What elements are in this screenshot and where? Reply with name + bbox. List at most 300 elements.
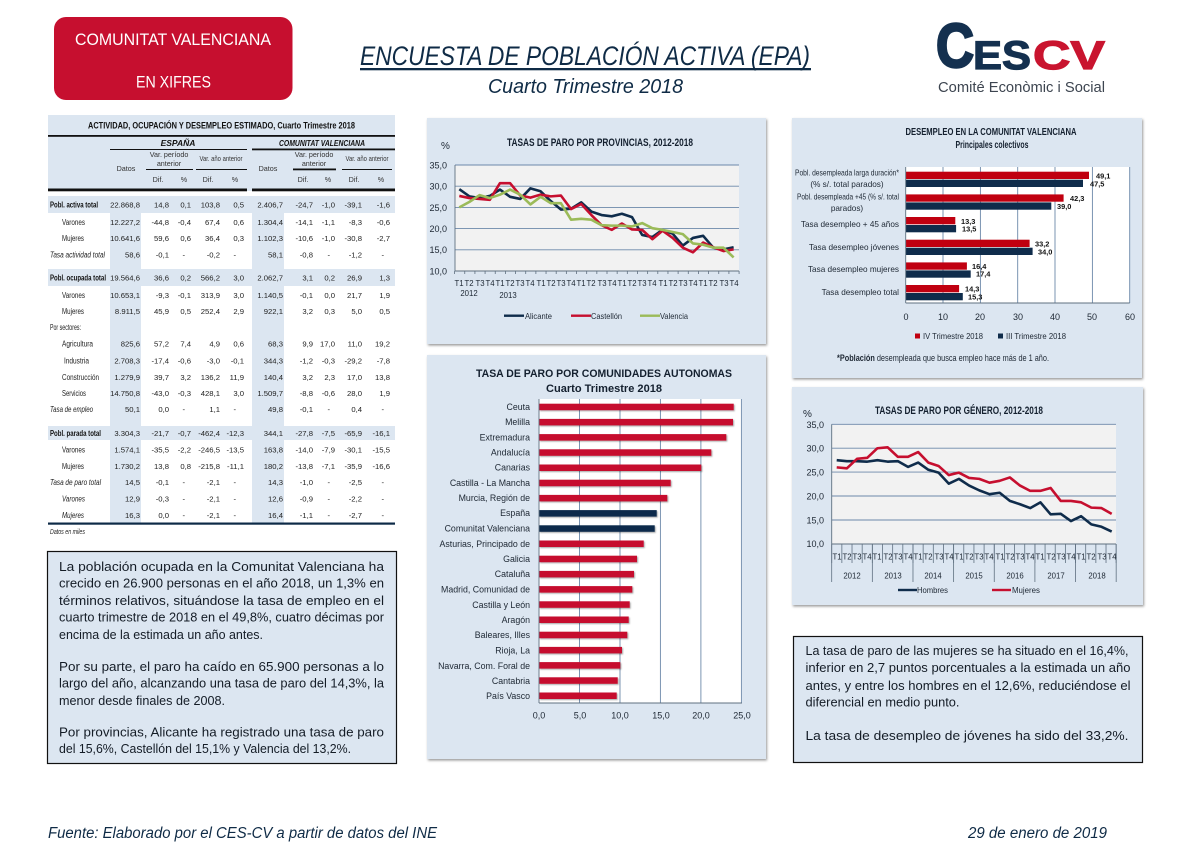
panel: tasa de paro por comunidades autonomas: Galicia [503, 554, 530, 564]
table: actividad, ocupacion y desempleo: Por sectores: [50, 323, 81, 332]
panel: tasas de paro por genero: T3 [893, 552, 903, 562]
table: actividad, ocupacion y desempleo: -2,7 [349, 511, 362, 520]
panel: desempleo en la Comunitat Valenciana: 47,5 [1090, 180, 1104, 188]
panel: tasa de paro por comunidades autonomas: Canarias [495, 462, 531, 472]
table: actividad, ocupacion y desempleo: -39,1 [344, 200, 362, 210]
panel: desempleo en la Comunitat Valenciana: IV Trimestre 2018 [923, 331, 983, 341]
panel: desempleo en la Comunitat Valenciana: 40 [1050, 312, 1060, 322]
table: actividad, ocupacion y desempleo: Datos en miles [50, 529, 85, 536]
table: actividad, ocupacion y desempleo: 344,1 [264, 429, 283, 438]
panel: tasa de paro por comunidades autonomas: Murcia, Región de [459, 493, 530, 503]
footer: fuente: Fuente: Elaborado por el CES-CV a partir de datos del INE [48, 825, 438, 842]
panel: desempleo en la Comunitat Valenciana: parados) [831, 204, 863, 213]
table: actividad, ocupacion y desempleo: % [232, 175, 239, 184]
table: actividad, ocupacion y desempleo: -0,6 [178, 356, 191, 366]
table: actividad, ocupacion y desempleo: - [327, 511, 330, 520]
panel: tasas de paro por provincias: T3 [556, 279, 566, 288]
table: actividad, ocupacion y desempleo: -0,3 [322, 356, 335, 366]
table: actividad, ocupacion y desempleo: 2.708,3 [114, 356, 140, 366]
logo: CES CV [936, 12, 1105, 96]
panel: tasas de paro por genero: T2 [1005, 552, 1015, 562]
table: actividad, ocupacion y desempleo: -8,8 [300, 389, 313, 398]
table: actividad, ocupacion y desempleo: 2.406,7 [257, 200, 283, 210]
line: Alicante [459, 188, 734, 249]
panel: desempleo en la Comunitat Valenciana: 60 [1125, 312, 1135, 322]
panel: tasa de paro por comunidades autonomas: Castilla - La Mancha [450, 478, 530, 488]
table: actividad, ocupacion y desempleo: Varones [62, 291, 85, 300]
table: actividad, ocupacion y desempleo: -7,5 [322, 429, 335, 438]
panel: tasas de paro por genero: T1 [832, 552, 842, 562]
table: actividad, ocupacion y desempleo: Datos [117, 164, 136, 173]
table: actividad, ocupacion y desempleo: 0,6 [233, 218, 244, 227]
table: actividad, ocupacion y desempleo: -1,6 [377, 200, 390, 210]
table: actividad, ocupacion y desempleo: 5,0 [351, 307, 362, 316]
table: actividad, ocupacion y desempleo: 11,9 [230, 373, 244, 382]
panel: tasas de paro por genero: T1 [1035, 552, 1045, 562]
table: actividad, ocupacion y desempleo: 36,4 [205, 234, 221, 243]
table: actividad, ocupacion y desempleo: -246,5 [198, 446, 220, 454]
panel: tasas de paro por provincias: T2 [505, 279, 515, 288]
panel: tasa de paro por comunidades autonomas: España [500, 508, 530, 518]
table: actividad, ocupacion y desempleo: -13,8 [295, 462, 313, 471]
text block: mujeres, hombres y jovenes: La tasa de desempleo de jóvenes ha sido del 33,2%. [806, 728, 1128, 743]
panel: desempleo en la Comunitat Valenciana [792, 118, 1142, 378]
table: actividad, ocupacion y desempleo: Dif. [153, 175, 163, 184]
table: actividad, ocupacion y desempleo: 28,0 [347, 389, 362, 398]
panel: tasas de paro por provincias: % [441, 141, 450, 152]
panel: desempleo en la Comunitat Valenciana: Tasa desempleo jóvenes [809, 243, 899, 252]
panel: tasas de paro por genero: T3 [852, 552, 862, 562]
panel: tasas de paro por provincias: T4 [525, 279, 535, 288]
table: actividad, ocupacion y desempleo: Var. año anterior [200, 154, 243, 163]
panel: tasas de paro por provincias: T1 [536, 279, 546, 288]
table: actividad, ocupacion y desempleo: 3,0 [233, 291, 244, 300]
table: actividad, ocupacion y desempleo: -16,1 [372, 429, 390, 438]
text block: mujeres, hombres y jovenes: inferior en 2,7 puntos porcentuales a la estimada un año [806, 660, 1130, 675]
table: actividad, ocupacion y desempleo: -30,1 [344, 446, 362, 454]
title [360, 41, 811, 98]
table: actividad, ocupacion y desempleo: 922,1 [264, 307, 283, 316]
panel: tasas de paro por genero: 2018 [1088, 572, 1106, 580]
table: actividad, ocupacion y desempleo: Var. año anterior [346, 154, 389, 163]
table: actividad, ocupacion y desempleo: 10.641,6 [110, 234, 140, 243]
table: actividad, ocupacion y desempleo: 12,9 [125, 494, 140, 504]
panel: tasas de paro por genero: T1 [1076, 552, 1086, 562]
line: Valencia [459, 190, 734, 257]
table: actividad, ocupacion y desempleo: 3,0 [233, 389, 244, 398]
table: actividad, ocupacion y desempleo: -0,4 [178, 218, 192, 227]
table: actividad, ocupacion y desempleo: 103,8 [201, 200, 220, 210]
table: actividad, ocupacion y desempleo: 0,1 [180, 200, 191, 210]
panel: tasa de paro por comunidades autonomas: Extremadura [480, 432, 530, 442]
table: actividad, ocupacion y desempleo: -17,4 [151, 356, 170, 366]
table: actividad, ocupacion y desempleo: - [381, 511, 384, 520]
table: actividad, ocupacion y desempleo: Tasa de paro total [50, 478, 101, 487]
panel: tasas de paro por genero: T1 [872, 552, 882, 562]
text block: empleo y paro: Por provincias, Alicante ha registrado una tasa de paro [59, 725, 384, 740]
panel: tasa de paro por comunidades autonomas: Cantabria [492, 676, 530, 686]
table: actividad, ocupacion y desempleo: - [381, 494, 384, 504]
table: actividad, ocupacion y desempleo: -16,6 [372, 462, 390, 471]
table: actividad, ocupacion y desempleo: 0,8 [180, 462, 191, 471]
table: actividad, ocupacion y desempleo: 1.574,1 [114, 446, 140, 454]
table: actividad, ocupacion y desempleo: -0,7 [178, 429, 191, 438]
table: actividad, ocupacion y desempleo: -24,7 [295, 200, 313, 210]
table: actividad, ocupacion y desempleo: Mujeres [62, 462, 84, 471]
panel: tasas de paro por provincias: T2 [708, 279, 718, 288]
table: actividad, ocupacion y desempleo: 45,9 [154, 307, 169, 316]
panel: tasas de paro por genero: T4 [862, 552, 872, 562]
panel: desempleo en la Comunitat Valenciana: 30 [1013, 312, 1023, 322]
panel: desempleo en la Comunitat Valenciana: 34,0 [1038, 248, 1052, 256]
table: actividad, ocupacion y desempleo: - [327, 494, 330, 504]
panel: tasas de paro por provincias: 2012 [460, 289, 478, 298]
table: actividad, ocupacion y desempleo: % [325, 175, 332, 184]
panel: tasas de paro por provincias: T2 [586, 279, 596, 288]
table: actividad, ocupacion y desempleo: -8,3 [349, 218, 362, 227]
table: actividad, ocupacion y desempleo: 0,3 [233, 234, 244, 243]
panel: tasas de paro por provincias: T3 [719, 279, 729, 288]
table: actividad, ocupacion y desempleo: anterior [157, 159, 182, 168]
table: actividad, ocupacion y desempleo: 2,3 [324, 373, 335, 382]
table: actividad, ocupacion y desempleo: -0,1 [300, 405, 313, 414]
table: actividad, ocupacion y desempleo: -44,8 [151, 218, 169, 227]
panel: tasas de paro por provincias: T2 [627, 279, 637, 288]
panel: desempleo en la Comunitat Valenciana: 49,1 [1096, 172, 1110, 180]
table: actividad, ocupacion y desempleo: Var. período [150, 150, 188, 159]
table: actividad, ocupacion y desempleo: -7,1 [322, 462, 335, 471]
table: actividad, ocupacion y desempleo: Varones [62, 446, 85, 454]
badge: Comunitat Valenciana en xifres: EN XIFRES [136, 73, 211, 91]
panel: desempleo en la Comunitat Valenciana: Tasa desempleo + 45 años [801, 220, 899, 229]
panel: desempleo en la Comunitat Valenciana: 33,2 [1035, 240, 1049, 248]
panel: desempleo en la Comunitat Valenciana: (% s/. total parados) [810, 180, 884, 189]
table: actividad, ocupacion y desempleo: 10.653,1 [110, 291, 140, 300]
table: actividad, ocupacion y desempleo: -30,8 [344, 234, 362, 243]
table: actividad, ocupacion y desempleo: 58,1 [268, 250, 283, 260]
table: actividad, ocupacion y desempleo: 0,5 [379, 307, 390, 316]
panel: tasas de paro por genero: T3 [1015, 552, 1025, 562]
table: actividad, ocupacion y desempleo: 0,0 [158, 405, 169, 414]
table: actividad, ocupacion y desempleo: -2,2 [178, 446, 191, 454]
panel: tasas de paro por provincias: T2 [464, 279, 474, 288]
table: actividad, ocupacion y desempleo: -29,2 [344, 356, 362, 366]
panel: tasas de paro por genero: 10,0 [806, 539, 824, 549]
table: actividad, ocupacion y desempleo: 11,0 [348, 340, 362, 348]
panel: tasas de paro por provincias: T1 [454, 279, 464, 288]
text block: empleo y paro: menor desde finales de 2008. [59, 693, 225, 708]
panel: tasas de paro por provincias: T3 [678, 279, 688, 288]
panel: tasas de paro por genero: 2016 [1006, 572, 1024, 580]
table: actividad, ocupacion y desempleo: -462,4 [198, 429, 221, 438]
table: actividad, ocupacion y desempleo: 1.140,5 [257, 291, 283, 300]
table: actividad, ocupacion y desempleo: Pobl. parada total [50, 429, 101, 438]
table: actividad, ocupacion y desempleo: 136,2 [201, 373, 220, 382]
table: actividad, ocupacion y desempleo: Tasa actividad total [50, 250, 105, 260]
panel: tasa de paro por comunidades autonomas: 15,0 [652, 710, 670, 720]
text block: empleo y paro: encima de la estimada un año antes. [59, 627, 263, 642]
table: actividad, ocupacion y desempleo: -1,1 [300, 511, 313, 520]
table: actividad, ocupacion y desempleo: 0,0 [324, 291, 335, 300]
panel: tasas de paro por genero: T4 [1025, 552, 1035, 562]
table: actividad, ocupacion y desempleo: 3,0 [233, 274, 244, 282]
panel: tasas de paro por provincias: T3 [637, 279, 647, 288]
table: actividad, ocupacion y desempleo: 14.750,8 [110, 389, 140, 398]
table: actividad, ocupacion y desempleo: 3,2 [180, 373, 191, 382]
table: actividad, ocupacion y desempleo: -1,0 [322, 234, 335, 243]
table: actividad, ocupacion y desempleo: Mujeres [62, 307, 84, 316]
table: actividad, ocupacion y desempleo: 4,9 [209, 340, 220, 348]
panel: tasas de paro por provincias: 2013 [499, 291, 517, 300]
table: actividad, ocupacion y desempleo: 58,6 [125, 250, 140, 260]
panel: tasas de paro por provincias: 10,0 [429, 266, 447, 276]
table: actividad, ocupacion y desempleo: -11,1 [227, 462, 244, 471]
logo: CES CV: CV [1033, 34, 1105, 78]
table: actividad, ocupacion y desempleo: Servicios [62, 389, 86, 398]
panel: desempleo en la Comunitat Valenciana: 42,3 [1070, 194, 1084, 203]
table: actividad, ocupacion y desempleo: % [181, 175, 188, 184]
table: actividad, ocupacion y desempleo: 140,4 [264, 373, 284, 382]
table: actividad, ocupacion y desempleo: -1,0 [322, 200, 335, 210]
table: actividad, ocupacion y desempleo: - [381, 250, 384, 260]
panel: tasas de paro por genero: T4 [903, 552, 913, 562]
panel: desempleo en la Comunitat Valenciana: Tasa desempleo total [822, 288, 899, 297]
table: actividad, ocupacion y desempleo: - [327, 250, 330, 260]
table: actividad, ocupacion y desempleo: - [182, 478, 185, 487]
table: actividad, ocupacion y desempleo: 3.304,3 [114, 429, 140, 438]
table: actividad, ocupacion y desempleo: Mujeres [62, 511, 84, 520]
line: Mujeres [837, 447, 1112, 514]
panel: tasas de paro por provincias: 15,0 [429, 245, 447, 255]
logo: CES CV: C [936, 12, 974, 81]
panel: tasas de paro por genero: 15,0 [806, 516, 824, 526]
panel: tasas de paro por genero [792, 387, 1143, 605]
table: actividad, ocupacion y desempleo: -43,0 [151, 389, 169, 398]
table: actividad, ocupacion y desempleo: -0,6 [322, 389, 335, 398]
table: actividad, ocupacion y desempleo: -215,8 [198, 462, 220, 471]
panel: tasas de paro por provincias: T4 [647, 279, 657, 288]
table: actividad, ocupacion y desempleo: -9,3 [156, 291, 169, 300]
table: actividad, ocupacion y desempleo: 8.911,5 [115, 307, 140, 316]
table: actividad, ocupacion y desempleo: 7,4 [180, 340, 192, 348]
text block: empleo y paro: crecido en 26.900 personas en el año 2018, un 1,3% en [59, 576, 384, 591]
panel: tasas de paro por genero: T2 [964, 552, 974, 562]
panel: tasas de paro por genero: 2014 [924, 572, 942, 580]
table: actividad, ocupacion y desempleo: 0,0 [158, 511, 169, 520]
table: actividad, ocupacion y desempleo: Dif. [203, 175, 213, 184]
table: actividad, ocupacion y desempleo: -0,1 [231, 356, 244, 366]
panel: tasa de paro por comunidades autonomas: Ceuta [507, 402, 530, 412]
table: actividad, ocupacion y desempleo: 1.730,2 [114, 462, 140, 471]
text block: empleo y paro: del 15,6%, Castellón del 15,1% y Valencia del 13,2%. [59, 741, 351, 756]
table: actividad, ocupacion y desempleo: 566,2 [201, 274, 220, 282]
panel: tasas de paro por genero: T1 [954, 552, 964, 562]
table: actividad, ocupacion y desempleo: - [182, 250, 185, 260]
table: actividad, ocupacion y desempleo: 2,9 [233, 307, 244, 316]
table: actividad, ocupacion y desempleo: -1,2 [300, 356, 313, 366]
table: actividad, ocupacion y desempleo: -2,2 [349, 494, 362, 504]
table: actividad, ocupacion y desempleo: 180,2 [264, 462, 283, 471]
panel: tasa de paro por comunidades autonomas: Navarra, Com. Foral de [438, 661, 530, 671]
table: actividad, ocupacion y desempleo: Dif. [349, 175, 359, 184]
table: actividad, ocupacion y desempleo: 0,5 [180, 307, 191, 316]
table: actividad, ocupacion y desempleo: COMUNITAT VALENCIANA [279, 138, 365, 148]
panel: tasas de paro por provincias: 30,0 [429, 182, 447, 192]
table: actividad, ocupacion y desempleo: -15,5 [372, 446, 390, 454]
table: actividad, ocupacion y desempleo: ESPAÑA [161, 138, 195, 148]
panel: tasas de paro por provincias: 20,0 [429, 224, 447, 234]
table: actividad, ocupacion y desempleo: 1,1 [209, 405, 220, 414]
panel: tasas de paro por provincias: T1 [617, 279, 627, 288]
panel: tasas de paro por provincias [427, 118, 766, 344]
table: actividad, ocupacion y desempleo: -35,9 [344, 462, 362, 471]
table: actividad, ocupacion y desempleo: Agricultura [62, 340, 93, 348]
table: actividad, ocupacion y desempleo: 36,6 [154, 274, 169, 282]
table: actividad, ocupacion y desempleo: 1.102,3 [257, 234, 283, 243]
table: actividad, ocupacion y desempleo: 1.279,9 [114, 373, 140, 382]
panel: tasas de paro por genero: T2 [1046, 552, 1056, 562]
table: actividad, ocupacion y desempleo: -2,1 [207, 511, 220, 520]
panel: tasas de paro por provincias: T4 [566, 279, 576, 288]
text block: empleo y paro: Por su parte, el paro ha caído en 65.900 personas a lo [59, 659, 384, 674]
table: actividad, ocupacion y desempleo: Varones [62, 218, 85, 227]
table: actividad, ocupacion y desempleo: - [233, 250, 236, 260]
table: actividad, ocupacion y desempleo: - [233, 405, 236, 414]
table: actividad, ocupacion y desempleo: 17,0 [320, 340, 335, 348]
panel: tasas de paro por genero: 2017 [1047, 572, 1065, 580]
table: actividad, ocupacion y desempleo: 2.062,7 [257, 274, 283, 282]
panel: tasa de paro por comunidades autonomas: 0,0 [533, 710, 545, 720]
table: actividad, ocupacion y desempleo: 21,7 [347, 291, 362, 300]
panel: tasa de paro por comunidades autonomas: Asturias, Principado de [440, 539, 530, 549]
table: actividad, ocupacion y desempleo: -1,0 [300, 478, 313, 487]
panel: tasas de paro por provincias: Valencia [660, 311, 688, 321]
table: actividad, ocupacion y desempleo: 14,3 [268, 478, 283, 487]
title: Cuarto Trimestre 2018 [488, 76, 683, 98]
table: actividad, ocupacion y desempleo: Construcción [62, 373, 99, 382]
table: actividad, ocupacion y desempleo: - [233, 511, 236, 520]
table: actividad, ocupacion y desempleo: 13,8 [375, 373, 390, 382]
panel: tasas de paro por provincias: Castellón [591, 311, 622, 321]
table: actividad, ocupacion y desempleo: % [378, 175, 385, 184]
panel: tasas de paro por provincias: T4 [607, 279, 617, 288]
table: actividad, ocupacion y desempleo: 57,2 [154, 340, 169, 348]
table: actividad, ocupacion y desempleo: 39,7 [154, 373, 169, 382]
text block: empleo y paro: La población ocupada en la Comunitat Valenciana ha [59, 559, 385, 574]
panel: tasa de paro por comunidades autonomas: País Vasco [486, 691, 530, 701]
panel: tasas de paro por genero: T4 [1107, 552, 1117, 562]
table: actividad, ocupacion y desempleo: 0,6 [180, 234, 191, 243]
table: actividad, ocupacion y desempleo: Tasa de empleo [50, 405, 93, 414]
table: actividad, ocupacion y desempleo: 50,1 [125, 405, 140, 414]
table: actividad, ocupacion y desempleo: -7,8 [377, 356, 390, 366]
table: actividad, ocupacion y desempleo: Pobl. ocupada total [50, 274, 106, 282]
table: actividad, ocupacion y desempleo: 3,2 [302, 307, 313, 316]
table: actividad, ocupacion y desempleo: 1.304,4 [257, 218, 284, 227]
table: actividad, ocupacion y desempleo: -0,1 [156, 250, 169, 260]
table: actividad, ocupacion y desempleo: 9,9 [302, 340, 313, 348]
panel: tasa de paro por comunidades autonomas: Comunitat Valenciana [445, 524, 530, 534]
panel: desempleo en la Comunitat Valenciana: *Población desempleada que busca empleo hace más de 1 año. [837, 353, 1049, 363]
table: actividad, ocupacion y desempleo: 3,2 [302, 373, 313, 382]
table: actividad, ocupacion y desempleo: -12,3 [226, 429, 244, 438]
panel: tasas de paro por provincias: T3 [475, 279, 485, 288]
table: actividad, ocupacion y desempleo: -14,0 [295, 446, 313, 454]
panel: tasas de paro por genero: 2013 [884, 572, 902, 580]
panel: tasa de paro por comunidades autonomas: Madrid, Comunidad de [441, 584, 530, 594]
panel: tasas de paro por provincias: TASAS DE PARO POR PROVINCIAS, 2012-2018 [507, 137, 693, 149]
panel: tasas de paro por genero: T3 [1097, 552, 1107, 562]
panel: desempleo en la Comunitat Valenciana: Principales colectivos [956, 139, 1029, 151]
table: actividad, ocupacion y desempleo: 14,8 [154, 200, 169, 210]
panel: tasas de paro por provincias: T3 [515, 279, 525, 288]
panel: tasa de paro por comunidades autonomas: Cuarto Trimestre 2018 [546, 383, 662, 395]
panel: tasas de paro por genero: 2012 [843, 572, 861, 580]
table: actividad, ocupacion y desempleo: 67,4 [205, 218, 221, 227]
panel: tasas de paro por genero: 20,0 [806, 492, 824, 502]
panel: desempleo en la Comunitat Valenciana: 0 [903, 312, 909, 322]
table: actividad, ocupacion y desempleo: 0,3 [324, 307, 335, 316]
table: actividad, ocupacion y desempleo: -2,1 [207, 494, 220, 504]
badge: Comunitat Valenciana en xifres: COMUNITAT VALENCIANA [75, 31, 271, 49]
table: actividad, ocupacion y desempleo: 1,9 [379, 291, 390, 300]
panel: desempleo en la Comunitat Valenciana: DESEMPLEO EN LA COMUNITAT VALENCIANA [906, 126, 1077, 138]
text block: mujeres, hombres y jovenes: antes, y entre los hombres en el 12,6%, reduciéndose el [806, 678, 1131, 693]
table: actividad, ocupacion y desempleo: anterior [302, 159, 327, 168]
title: ENCUESTA DE POBLACIÓN ACTIVA (EPA) [360, 41, 810, 71]
table: actividad, ocupacion y desempleo: 17,0 [347, 373, 362, 382]
table: actividad, ocupacion y desempleo: 68,3 [268, 340, 283, 348]
table: actividad, ocupacion y desempleo: 0,2 [324, 274, 335, 282]
table: actividad, ocupacion y desempleo: -0,8 [300, 250, 313, 260]
panel: tasas de paro por genero: 30,0 [806, 444, 824, 454]
table: actividad, ocupacion y desempleo: -0,3 [156, 494, 169, 504]
table: actividad, ocupacion y desempleo: 12.227,2 [110, 218, 140, 227]
table: actividad, ocupacion y desempleo [48, 115, 395, 536]
table: actividad, ocupacion y desempleo: - [327, 405, 330, 414]
panel: desempleo en la Comunitat Valenciana: 14,3 [965, 284, 979, 294]
panel: desempleo en la Comunitat Valenciana: 50 [1087, 312, 1097, 322]
panel: tasa de paro por comunidades autonomas: Castilla y León [472, 600, 530, 610]
table: actividad, ocupacion y desempleo: 252,4 [201, 307, 221, 316]
table: actividad, ocupacion y desempleo: 825,6 [121, 340, 140, 348]
table: actividad, ocupacion y desempleo: ACTIVIDAD, OCUPACIÓN Y DESEMPLEO ESTIMADO, Cuarto Trimestre 2018 [88, 120, 355, 132]
panel: tasa de paro por comunidades autonomas: TASA DE PARO POR COMUNIDADES AUTONOMAS [476, 368, 732, 380]
table: actividad, ocupacion y desempleo: -0,6 [377, 218, 390, 227]
panel: tasa de paro por comunidades autonomas: 20,0 [692, 710, 710, 720]
panel: tasas de paro por genero: % [803, 409, 812, 420]
table: actividad, ocupacion y desempleo: -1,2 [349, 250, 362, 260]
panel: desempleo en la Comunitat Valenciana: 20 [975, 312, 985, 322]
table: actividad, ocupacion y desempleo: -14,1 [295, 218, 313, 227]
text block: empleo y paro: largo del año, alcanzando una tasa de paro del 14,3%, la [59, 676, 385, 691]
panel: tasas de paro por genero: TASAS DE PARO POR GÉNERO, 2012-2018 [875, 404, 1043, 417]
table: actividad, ocupacion y desempleo: Pobl. activa total [50, 200, 98, 210]
table: actividad, ocupacion y desempleo: - [381, 405, 384, 414]
table: actividad, ocupacion y desempleo: 1,3 [379, 274, 390, 282]
line: Castellon [459, 183, 734, 252]
table: actividad, ocupacion y desempleo: 344,3 [264, 356, 283, 366]
table: actividad, ocupacion y desempleo: -13,5 [226, 446, 244, 454]
table: actividad, ocupacion y desempleo: -65,9 [344, 429, 362, 438]
table: actividad, ocupacion y desempleo: Datos [259, 164, 278, 173]
table: actividad, ocupacion y desempleo: -0,1 [178, 291, 191, 300]
panel: tasas de paro por provincias: T4 [485, 279, 495, 288]
text block: mujeres, hombres y jovenes [794, 636, 1142, 762]
line: Hombres [837, 460, 1112, 532]
table: actividad, ocupacion y desempleo: 0,5 [233, 200, 244, 210]
table: actividad, ocupacion y desempleo: 0,6 [233, 340, 244, 348]
